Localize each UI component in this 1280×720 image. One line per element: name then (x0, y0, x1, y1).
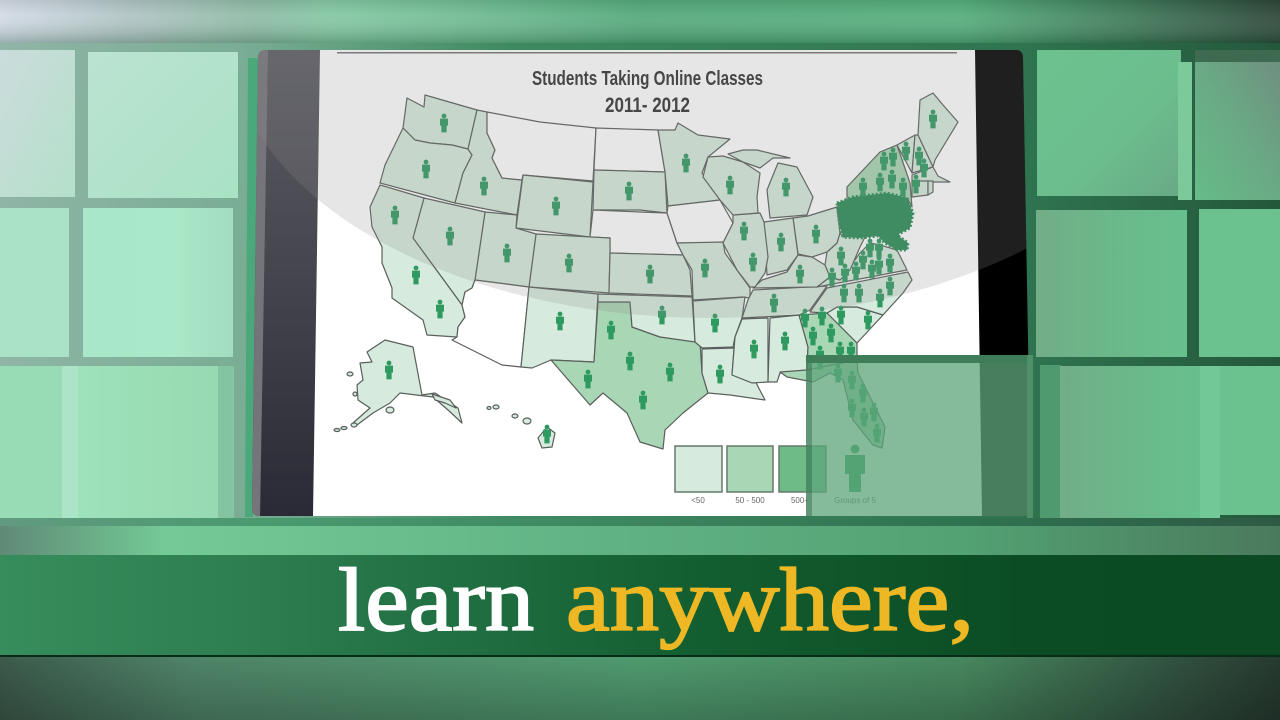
green edge of tablet (245, 58, 260, 517)
bottom band (0, 655, 1280, 720)
screen white page (313, 50, 982, 516)
legend (675, 444, 876, 505)
person markers (385, 110, 937, 443)
legend swatch: 50 to 500 (727, 446, 773, 492)
left window panels (0, 50, 238, 519)
caption text: anywhere, (566, 551, 974, 650)
caption text: learn (338, 551, 534, 650)
map title: 2011- 2012 (605, 94, 690, 117)
legend labels (692, 497, 876, 504)
map title: Students Taking Online Classes (532, 68, 763, 90)
lower frame bar (0, 518, 1280, 526)
screen bezel (248, 48, 1035, 518)
caption text (338, 551, 974, 650)
Hawaii (487, 405, 555, 448)
map title (532, 70, 762, 112)
Alaska islands (334, 372, 456, 432)
US map states (334, 93, 958, 449)
legend labels: <50 (691, 496, 705, 505)
right window panels (1036, 50, 1280, 520)
caption band (0, 551, 1280, 655)
legend swatch: 500 plus (779, 446, 826, 492)
icon: dense Pennsylvania and mid-Atlantic cluster (837, 193, 913, 250)
legend person icon (845, 444, 865, 492)
top band (0, 0, 1280, 43)
light band above caption (0, 526, 1280, 555)
legend labels: 500+ (791, 496, 809, 505)
glass glare arc (266, 50, 1026, 318)
legend swatch: under 50 (675, 446, 722, 492)
tablet screen with map (252, 50, 1028, 516)
page rule (337, 52, 957, 54)
overlay pane border (806, 355, 1033, 518)
legend labels: 50 - 500 (735, 496, 765, 505)
Alaska (353, 340, 462, 425)
overlay glass pane (806, 363, 1028, 518)
legend labels: Groups of 5 (834, 496, 876, 505)
